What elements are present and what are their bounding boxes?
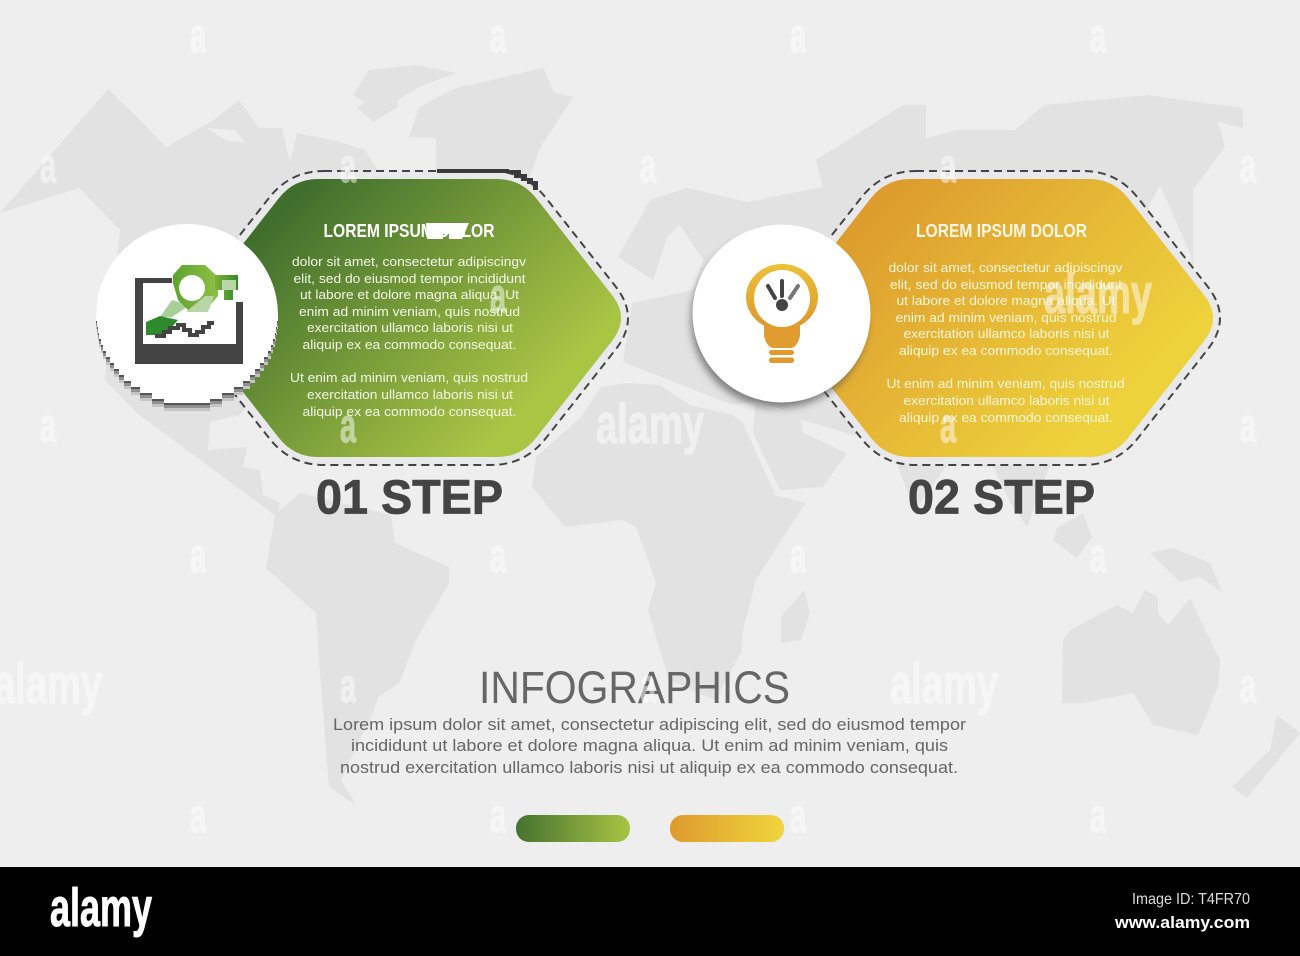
arctic island — [353, 65, 456, 122]
africa — [532, 383, 806, 700]
legend pill green — [516, 815, 630, 842]
icon: picture with magnifier — [135, 265, 243, 364]
watermarks: a — [790, 10, 806, 63]
icon circle step 2 — [692, 224, 870, 402]
step 1 heading: LOREM IPSUM DOLOR — [324, 221, 494, 241]
step 1 text: exercitation ullamco laboris nisi ut — [307, 320, 513, 335]
hudson notch — [207, 128, 245, 143]
watermarks: a — [40, 140, 56, 193]
circle shadow step 1 — [96, 226, 278, 411]
watermarks: a — [490, 270, 506, 323]
description text — [333, 715, 966, 777]
description text: nostrud exercitation ullamco laboris nisi ut aliquip ex ea commodo consequat. — [340, 758, 958, 777]
image id: Image ID: T4FR70 — [1132, 891, 1250, 908]
watermarks: a — [1090, 790, 1106, 843]
south america — [266, 493, 449, 805]
step 1 text: exercitation ullamco laboris nisi ut — [307, 387, 513, 402]
dashed outline step 1 — [187, 171, 628, 465]
step 2 text: exercitation ullamco laboris nisi ut — [904, 393, 1110, 408]
step 1 text: elit, sed do eiusmod tempor incididunt — [294, 271, 526, 286]
step 2 label: 02 STEP — [908, 472, 1095, 524]
website: www.alamy.com — [1114, 913, 1250, 932]
watermarks: a — [940, 400, 956, 453]
watermarks: a — [340, 660, 356, 713]
new zealand — [1232, 715, 1300, 798]
description text: incididunt ut labore et dolore magna aliqua. Ut enim ad minim veniam, quis — [351, 736, 948, 755]
step 1 text: ut labore et dolore magna aliqua. Ut — [300, 287, 519, 302]
step 2 text: exercitation ullamco laboris nisi ut — [904, 326, 1110, 341]
icon: light bulb — [746, 264, 818, 363]
watermarks: a — [790, 530, 806, 583]
watermarks: a — [1240, 140, 1256, 193]
watermarks: a — [490, 790, 506, 843]
watermarks: a — [190, 530, 206, 583]
world map — [0, 65, 1300, 805]
watermarks: a — [190, 790, 206, 843]
watermarks: a — [1090, 530, 1106, 583]
step 1 text: Ut enim ad minim veniam, quis nostrud — [290, 370, 528, 385]
footer logo: alamy — [50, 878, 152, 938]
watermarks: a — [1090, 10, 1106, 63]
watermarks: a — [1240, 400, 1256, 453]
watermarks: a — [640, 140, 656, 193]
step 2 text: dolor sit amet, consectetur adipiscingv — [888, 260, 1123, 275]
watermarks: alamy — [890, 652, 998, 715]
step 1 label: 01 STEP — [316, 472, 503, 524]
circle shadow step 2 — [691, 232, 867, 408]
hexagon step 2 — [786, 179, 1213, 457]
legend pill yellow — [670, 815, 784, 842]
watermarks: a — [940, 140, 956, 193]
panel: step 1 — [96, 169, 628, 524]
dashed outline step 2 — [779, 171, 1220, 465]
step 2 text — [886, 260, 1124, 425]
watermarks: alamy — [1044, 262, 1152, 325]
step 1 text: aliquip ex ea commodo consequat. — [302, 404, 516, 419]
step 2 text: enim ad minim veniam, quis nostrud — [896, 310, 1116, 325]
watermarks: alamy — [596, 392, 704, 455]
panel: step 2 — [691, 171, 1220, 524]
greenland — [409, 68, 573, 190]
description text: Lorem ipsum dolor sit amet, consectetur adipiscing elit, sed do eiusmod tempor — [333, 715, 966, 734]
step 1 text: enim ad minim veniam, quis nostrud — [299, 304, 520, 319]
watermarks: a — [40, 400, 56, 453]
watermarks: a — [190, 10, 206, 63]
australia — [1062, 590, 1220, 735]
watermarks: a — [340, 400, 356, 453]
watermarks: a — [340, 140, 356, 193]
hexagon step 1 — [194, 179, 621, 457]
madagascar — [781, 590, 810, 643]
step 2 text: aliquip ex ea commodo consequat. — [899, 343, 1113, 358]
watermarks: a — [490, 10, 506, 63]
eurasia — [618, 95, 1243, 527]
step 2 text: ut labore et dolore magna aliqua. Ut — [896, 293, 1116, 308]
watermarks: a — [1240, 660, 1256, 713]
step 1 text: dolor sit amet, consectetur adipiscingv — [292, 254, 527, 269]
watermarks: a — [790, 790, 806, 843]
arabia — [753, 405, 847, 490]
step 1 text — [290, 254, 528, 419]
step 2 text: elit, sed do eiusmod tempor incididunt — [890, 277, 1122, 292]
watermarks: a — [640, 660, 656, 713]
title: INFOGRAPHICS — [479, 662, 790, 713]
step 2 text: aliquip ex ea commodo consequat. — [899, 410, 1113, 425]
outline glitch — [437, 169, 538, 190]
step 2 heading: LOREM IPSUM DOLOR — [916, 221, 1087, 241]
watermarks: a — [490, 530, 506, 583]
icon circle step 1 — [96, 224, 278, 403]
step 2 text: Ut enim ad minim veniam, quis nostrud — [886, 376, 1124, 391]
step 1 text: aliquip ex ea commodo consequat. — [302, 337, 516, 352]
new guinea — [1150, 548, 1222, 592]
footer bar — [0, 867, 1300, 956]
borneo — [1053, 513, 1092, 558]
north america — [0, 89, 420, 517]
